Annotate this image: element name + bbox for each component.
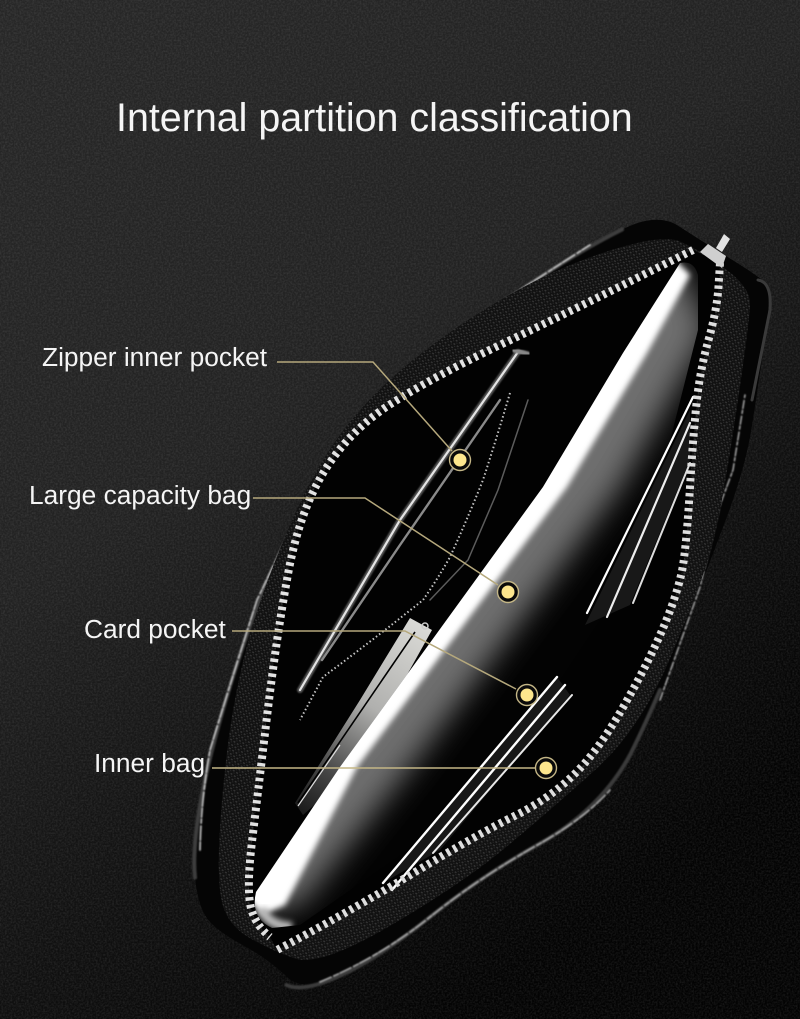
callout: large capacity bag: Large capacity bag — [29, 480, 251, 510]
outer leather body — [194, 220, 769, 984]
card pocket plate — [295, 618, 432, 815]
callout: large capacity bag — [29, 480, 518, 602]
callout: zipper inner pocket: Zipper inner pocket — [42, 342, 268, 372]
inner zipper of the pocket — [300, 393, 510, 720]
callout: zipper inner pocket — [42, 342, 470, 470]
zipper teeth — [249, 250, 720, 950]
callout: card pocket: Card pocket — [84, 614, 226, 644]
callout: inner bag — [94, 748, 556, 778]
inner bag stripes — [383, 397, 693, 890]
leather stitched edges — [194, 230, 770, 987]
tablet with white highlight — [240, 250, 710, 928]
black interior — [249, 250, 720, 950]
callout: card pocket — [84, 614, 538, 706]
title: Internal partition classification — [116, 96, 633, 140]
textured zipper band — [219, 239, 750, 960]
callout: inner bag: Inner bag — [94, 748, 205, 778]
open wallet illustration — [194, 220, 770, 987]
phone shape in zipper pocket — [300, 350, 528, 690]
zipper pull — [700, 234, 730, 268]
